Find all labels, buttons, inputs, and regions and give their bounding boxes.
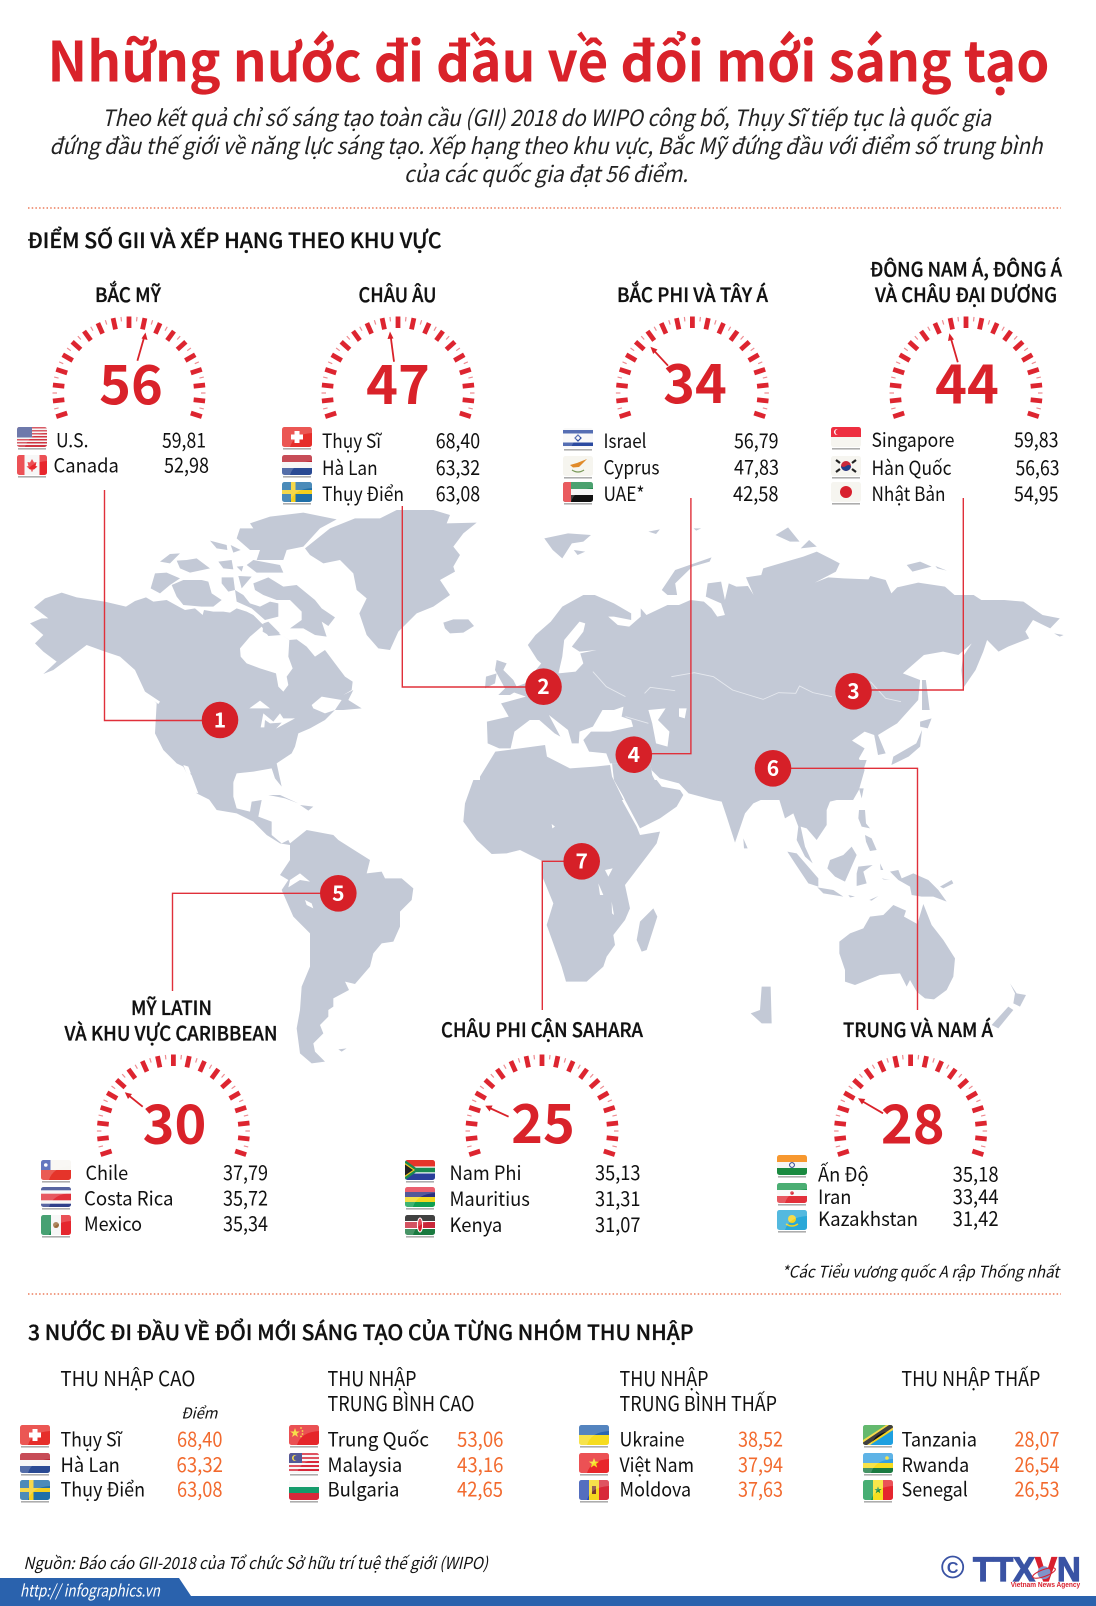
heading: VÀ CHÂU ĐẠI DƯƠNG: [874, 279, 1057, 308]
heading: [870, 254, 1063, 308]
heading: TRUNG VÀ NAM Á: [843, 1014, 994, 1043]
row: Kenya: [405, 1208, 640, 1238]
row: Nhật Bản: 54,95: [1014, 477, 1058, 507]
central and south america, africa: [190, 773, 683, 1063]
heading: MỸ LATIN: [131, 992, 212, 1021]
heading: CHÂU ÂU: [358, 279, 436, 308]
row: Hàn Quốc: 56,63: [1016, 451, 1060, 481]
marker 5: 5: [332, 878, 344, 908]
heading: TRUNG BÌNH CAO: [328, 1387, 474, 1417]
row: Ukraine: Ukraine: [620, 1424, 684, 1452]
gauge: [466, 1054, 618, 1155]
row: Senegal: 26,53: [1014, 1472, 1060, 1502]
agency name: Vietnam News Agency: [1011, 1580, 1081, 1589]
row: Israel: [563, 424, 778, 454]
connector line 6: [773, 768, 918, 1010]
row: Việt Nam: [579, 1448, 783, 1478]
marker 4: [616, 736, 652, 773]
row: Hà Lan: 63,32: [436, 451, 480, 481]
row: Mexico: [41, 1207, 268, 1238]
row: Thụy Sĩ: [20, 1422, 222, 1452]
row: Tanzania: 28,07: [1014, 1422, 1060, 1452]
row: Tanzania: [863, 1422, 1060, 1452]
row: Moldova: 37,63: [738, 1472, 783, 1502]
gauge needle: [137, 332, 148, 361]
row: Trung Quốc: Trung Quốc: [328, 1424, 429, 1452]
heading: BẮC MỸ: [95, 279, 162, 308]
panel: lower middle income: [579, 1362, 783, 1503]
row: Thụy Điển: [282, 477, 480, 507]
heading: THU NHẬP: [620, 1362, 708, 1392]
marker 5: [320, 875, 357, 912]
row: Thụy Sĩ: 68,40: [177, 1422, 222, 1452]
marker 3: 3: [847, 676, 860, 706]
footer url: http:// infographics.vn: [20, 1578, 161, 1602]
row: Nhật Bản: Nhật Bản: [872, 478, 946, 507]
heading: [64, 992, 278, 1047]
gauge: [616, 316, 769, 417]
row: Tanzania: Tanzania: [902, 1424, 977, 1452]
score: 28: [881, 1080, 945, 1160]
gauge needle: [485, 1106, 509, 1117]
row: Kazakhstan: 31,42: [953, 1202, 999, 1232]
row: Israel: Israel: [604, 425, 646, 454]
row: U.S.: 59,81: [162, 424, 206, 454]
row: Singapore: Singapore: [872, 424, 954, 453]
row: Hà Lan: [20, 1448, 223, 1478]
section heading: income groups: 3 NƯỚC ĐI ĐẦU VỀ ĐỔI MỚI SÁNG TẠO CỦA TỪNG NHÓM THU NHẬP: [28, 1317, 694, 1347]
row: Thụy Điển: 63,08: [436, 477, 480, 507]
row: Chile: [41, 1156, 268, 1186]
gauge needle: [948, 333, 958, 362]
row: U.S.: [17, 424, 206, 454]
panel: Bắc Phi và Tây Á: [563, 279, 779, 507]
row: Canada: [17, 448, 209, 478]
row: Moldova: [579, 1472, 783, 1503]
marker 7: [563, 843, 600, 880]
row: Iran: 33,44: [953, 1180, 999, 1210]
row: Bulgaria: Bulgaria: [328, 1474, 400, 1502]
row: Rwanda: [863, 1448, 1060, 1478]
connector line 2: [402, 506, 544, 687]
row: Trung Quốc: 53,06: [457, 1422, 504, 1452]
south asia, southeast asia, oceania: [673, 760, 1026, 1028]
row: Chile: Chile: [86, 1157, 128, 1186]
row: Hà Lan: Hà Lan: [322, 452, 378, 481]
row: Kazakhstan: [777, 1202, 999, 1233]
row: Thụy Điển: Thụy Điển: [322, 478, 404, 507]
row: Nhật Bản: [831, 477, 1058, 507]
connector line 4: [634, 498, 691, 754]
connector line 3: [854, 498, 963, 690]
logo: TTXVN: [942, 1551, 1081, 1589]
heading: THU NHẬP THẤP: [901, 1362, 1040, 1392]
heading: ĐÔNG NAM Á, ĐÔNG Á: [870, 254, 1063, 282]
row: Hà Lan: [282, 451, 480, 481]
row: U.S.: U.S.: [56, 424, 88, 454]
heading: VÀ KHU VỰC CARIBBEAN: [64, 1018, 278, 1047]
heading: TRUNG BÌNH THẤP: [620, 1387, 777, 1417]
row: Mauritius: [405, 1182, 640, 1212]
marker 7: 7: [576, 846, 588, 876]
panel: Châu Âu: [282, 279, 480, 507]
row: Mexico: Mexico: [84, 1208, 142, 1237]
heading: CHÂU PHI CẬN SAHARA: [441, 1014, 644, 1043]
row: Thụy Sĩ: 68,40: [436, 424, 480, 454]
panel: high income: [20, 1362, 223, 1503]
score: 47: [366, 341, 430, 420]
footer bar: [0, 1578, 1096, 1606]
intro text: Theo kết quả chỉ số sáng tạo toàn cầu (GII) 2018 do WIPO công bố, Thụy Sĩ tiếp tục là quốc gia: [102, 101, 992, 133]
gauge needle: [650, 347, 668, 366]
row: Việt Nam: 37,94: [738, 1448, 783, 1478]
row: Kenya: Kenya: [450, 1209, 502, 1238]
row: Iran: [777, 1180, 999, 1210]
row: Bulgaria: 42,65: [457, 1472, 503, 1502]
row: UAE: UAE*: [604, 478, 644, 507]
row: Trung Quốc: [289, 1422, 504, 1452]
row: Costa Rica: 35,72: [223, 1182, 268, 1212]
copyright symbol: C: [947, 1560, 959, 1577]
row: Malaysia: Malaysia: [328, 1449, 402, 1478]
panel: Mỹ Latin và khu vực Caribbean: [41, 992, 278, 1238]
gauge: [834, 1054, 987, 1155]
row: Kenya: 31,07: [595, 1208, 640, 1238]
row: Iran: Iran: [818, 1181, 852, 1210]
row: Việt Nam: Việt Nam: [620, 1449, 694, 1478]
row: Canada: Canada: [54, 450, 119, 478]
panel: Bắc Mỹ: [17, 279, 209, 478]
score: 56: [99, 341, 163, 420]
marker 1: 1: [214, 704, 226, 734]
row: Thụy Sĩ: [282, 424, 480, 454]
row: Hàn Quốc: Hàn Quốc: [872, 452, 952, 481]
row: Nam Phi: Nam Phi: [450, 1157, 522, 1186]
footnote: *Các Tiểu vương quốc A rập Thống nhất: [782, 1258, 1061, 1282]
row: Cyprus: 47,83: [734, 450, 779, 480]
row: Hà Lan: Hà Lan: [60, 1449, 120, 1478]
heading: [620, 1362, 777, 1417]
intro text: đứng đầu thế giới về năng lực sáng tạo. Xếp hạng theo khu vực, Bắc Mỹ đứng đầu với điểm số trung bình: [50, 129, 1044, 161]
connector line 7: [542, 861, 582, 1010]
marker 3: [835, 673, 872, 710]
row: Ukraine: [579, 1422, 783, 1452]
row: Bulgaria: [289, 1472, 503, 1503]
row: Costa Rica: [41, 1182, 268, 1212]
score: 34: [663, 340, 727, 419]
world map: [30, 510, 1064, 1063]
row: Canada: 52,98: [164, 448, 209, 478]
row: Costa Rica: Costa Rica: [84, 1183, 174, 1212]
row: Ấn Độ: [777, 1155, 999, 1188]
gauge: [52, 316, 206, 417]
row: UAE: 42,58: [733, 477, 778, 507]
marker 6: 6: [767, 752, 779, 782]
row: Thụy Sĩ: Thụy Sĩ: [322, 425, 382, 454]
title: Những nước đi đầu về đổi mới sáng tạo: [48, 18, 1050, 98]
globe: [1032, 1566, 1056, 1580]
row: Israel: 56,79: [734, 424, 778, 454]
row: Cyprus: [563, 450, 779, 480]
row: Mauritius: 31,31: [595, 1182, 640, 1212]
heading: THU NHẬP CAO: [60, 1362, 195, 1392]
connector line 1: [104, 490, 220, 720]
row: Singapore: 59,83: [1014, 423, 1058, 453]
row: Thụy Sĩ: Thụy Sĩ: [60, 1424, 123, 1452]
intro text: của các quốc gia đạt 56 điểm.: [404, 157, 688, 189]
panel: Trung và Nam Á: [777, 1014, 999, 1233]
row: Nam Phi: 35,13: [595, 1156, 640, 1186]
row: Senegal: [863, 1472, 1060, 1503]
gauge: [97, 1054, 250, 1155]
gauge: [890, 316, 1042, 417]
section heading: GII scores by region: ĐIỂM SỐ GII VÀ XẾP HẠNG THEO KHU VỰC: [28, 225, 442, 255]
panel: low income: [863, 1362, 1060, 1503]
panel: Châu Phi cận Sahara: [405, 1014, 644, 1238]
row: Mexico: 35,34: [223, 1207, 268, 1237]
score column label: Điểm: [181, 1402, 219, 1424]
row: Thụy Điển: 63,08: [177, 1472, 222, 1502]
row: Thụy Điển: [20, 1472, 222, 1503]
heading: [328, 1362, 474, 1417]
row: Nam Phi: [405, 1156, 640, 1186]
row: Ukraine: 38,52: [738, 1422, 783, 1452]
heading: BẮC PHI VÀ TÂY Á: [617, 279, 769, 308]
marker 6: [755, 750, 791, 787]
gauge needle: [388, 332, 394, 362]
eurasia: [480, 527, 1064, 800]
gauge needle: [858, 1098, 883, 1113]
row: Hà Lan: 63,32: [176, 1448, 223, 1478]
row: Malaysia: [289, 1448, 504, 1478]
row: Moldova: Moldova: [620, 1474, 691, 1502]
row: Malaysia: 43,16: [457, 1448, 504, 1478]
heading: THU NHẬP: [328, 1362, 416, 1392]
marker 4: 4: [628, 739, 640, 769]
gauge: [322, 316, 474, 417]
row: Senegal: Senegal: [902, 1474, 968, 1502]
row: Cyprus: Cyprus: [604, 452, 660, 480]
row: Rwanda: Rwanda: [902, 1449, 969, 1478]
row: Thụy Điển: Thụy Điển: [60, 1474, 145, 1502]
row: Kazakhstan: Kazakhstan: [818, 1203, 918, 1232]
row: Hàn Quốc: [831, 451, 1060, 481]
row: Chile: 37,79: [223, 1156, 268, 1186]
row: UAE: [563, 477, 778, 507]
row: Mauritius: Mauritius: [450, 1183, 530, 1212]
panel: upper middle income: [289, 1362, 504, 1503]
north america and arctic: [30, 510, 518, 800]
panel: Đông Nam Á, Đông Á và Châu Đại Dương: [831, 254, 1063, 507]
score: 30: [143, 1080, 206, 1160]
row: Ấn Độ: Ấn Độ: [818, 1159, 869, 1188]
source note: Nguồn: Báo cáo GII-2018 của Tổ chức Sở hữu trí tuệ thế giới (WIPO): [24, 1550, 489, 1574]
row: Singapore: [831, 423, 1058, 453]
marker 2: [525, 668, 562, 705]
row: Ấn Độ: 35,18: [953, 1158, 999, 1188]
intro text: [50, 101, 1044, 189]
gauge needle: [125, 1092, 143, 1107]
row: Rwanda: 26,54: [1014, 1448, 1060, 1478]
connector line 5: [172, 893, 338, 991]
marker 2: 2: [537, 671, 550, 701]
score: 25: [511, 1080, 575, 1159]
marker 1: [202, 702, 238, 738]
wordmark: TTXVN: [973, 1551, 1081, 1589]
score: 44: [935, 340, 999, 420]
